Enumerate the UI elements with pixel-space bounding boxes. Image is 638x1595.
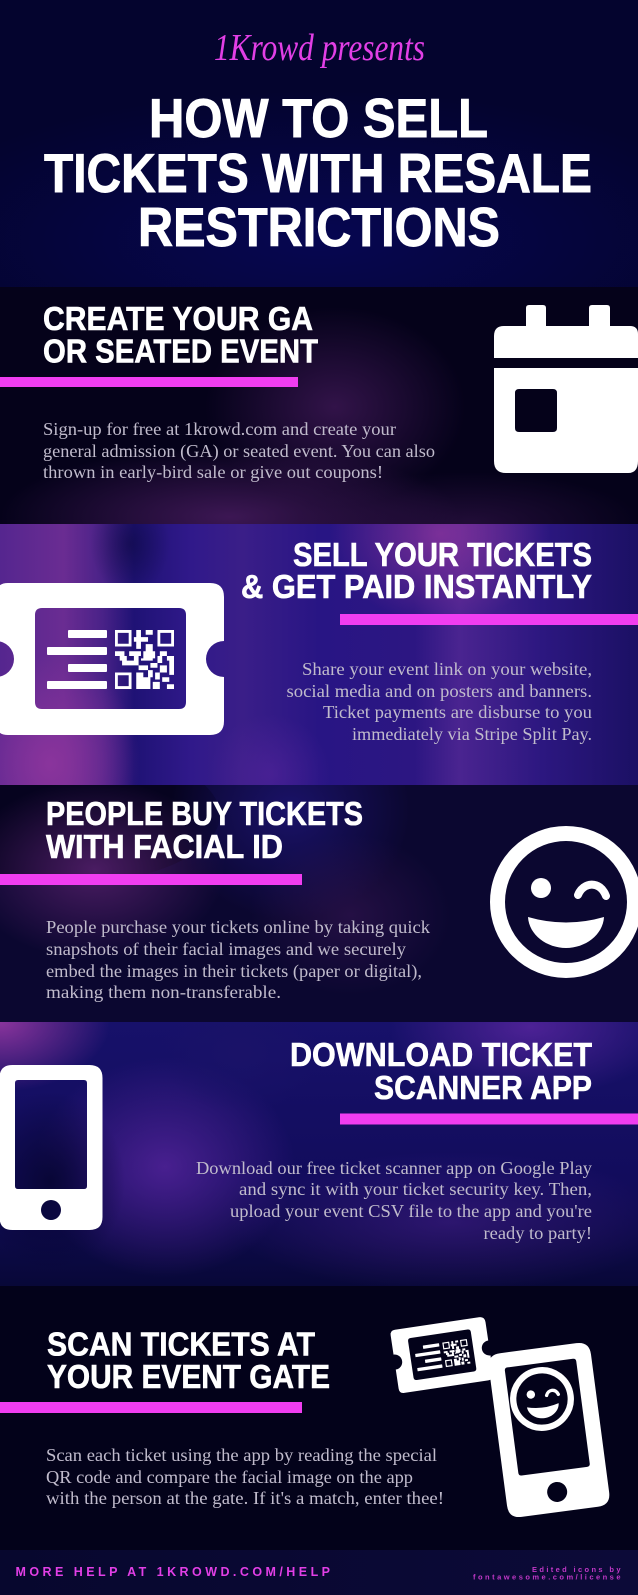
step 4 heading: SCANNER APP (374, 1069, 592, 1106)
step 2 body text: immediately via Stripe Split Pay. (352, 724, 592, 744)
step 1 body text: thrown in early-bird sale or give out coupons! (43, 462, 383, 482)
step 2 heading: & GET PAID INSTANTLY (241, 568, 592, 605)
step 5 heading: SCAN TICKETS AT (47, 1326, 315, 1362)
panel: step 1 create event (0, 287, 638, 587)
panel: step 3 facial ID (0, 700, 638, 1022)
step 3 body text: embed the images in their tickets (paper or digital), (46, 961, 422, 982)
panel: step 4 scanner app (0, 952, 638, 1292)
panel: step 2 sell tickets (0, 444, 638, 874)
step 2 body text: Ticket payments are disburse to you (323, 702, 592, 722)
step 5 heading (47, 1326, 330, 1395)
step 4 body text: Download our free ticket scanner app on Google Play (196, 1158, 592, 1178)
footer icon credit: fontawesome.com/license (473, 1572, 620, 1582)
step 4 body text: upload your event CSV file to the app and you're (230, 1201, 592, 1221)
step 1 body text: general admission (GA) or seated event. You can also (43, 441, 435, 462)
step 4 accent bar (340, 1114, 638, 1124)
step 5 body text: QR code and compare the facial image on the app (46, 1467, 413, 1487)
icon: phone (0, 1065, 102, 1230)
footer icon credit (473, 1565, 621, 1582)
step 5 accent bar (0, 1402, 302, 1413)
step 3 body text: making them non-transferable. (46, 982, 281, 1002)
title (44, 88, 592, 258)
step 3 body text (46, 917, 430, 1002)
step 1 heading (43, 300, 318, 370)
step 3 body text: People purchase your tickets online by taking quick (46, 917, 430, 937)
step 1 accent bar (0, 377, 298, 387)
step 1 heading: CREATE YOUR GA (43, 300, 313, 337)
step 2 body text: social media and on posters and banners. (286, 681, 592, 701)
step 4 heading: DOWNLOAD TICKET (290, 1036, 592, 1073)
icon: calendar (494, 305, 638, 473)
title: HOW TO SELL (149, 88, 488, 149)
step 2 heading: SELL YOUR TICKETS (293, 536, 592, 573)
step 4 heading (290, 1036, 592, 1106)
step 2 heading (241, 536, 592, 605)
step 3 body text: snapshots of their facial images and we securely (46, 939, 406, 959)
step 2 body text: Share your event link on your website, (302, 659, 592, 679)
step 5 body text: Scan each ticket using the app by reading the special (46, 1445, 437, 1465)
step 3 accent bar (0, 874, 302, 885)
step 5 body text: with the person at the gate. If it's a match, enter thee! (46, 1488, 444, 1508)
step 2 body text (286, 659, 592, 744)
step 3 heading: WITH FACIAL ID (46, 828, 283, 865)
step 5 heading: YOUR EVENT GATE (47, 1358, 330, 1395)
icon: winking face (498, 834, 634, 970)
footer help link: MORE HELP AT 1KROWD.COM/HELP (16, 1565, 330, 1579)
icon: ticket with QR code (0, 583, 224, 735)
subtitle: 1Krowd presents: 1Krowd presents (214, 27, 425, 69)
panel: footer (0, 1550, 638, 1595)
step 1 heading: OR SEATED EVENT (43, 332, 318, 370)
panel: header (0, 0, 638, 390)
step 3 heading: PEOPLE BUY TICKETS (46, 795, 363, 832)
step 5 body text (46, 1445, 444, 1508)
step 4 body text (196, 1158, 592, 1243)
footer icon credit: Edited icons by (532, 1565, 621, 1574)
step 1 body text: Sign-up for free at 1krowd.com and create your (43, 419, 396, 439)
step 4 body text: ready to party! (484, 1223, 592, 1243)
icon: ticket and phone with face (390, 1316, 611, 1519)
step 2 accent bar (340, 614, 638, 625)
step 3 heading (46, 795, 363, 865)
title: RESTRICTIONS (138, 197, 500, 258)
step 1 body text (43, 419, 435, 482)
panel: step 5 scan tickets (0, 1286, 638, 1550)
step 4 body text: and sync it with your ticket security key. Then, (239, 1179, 592, 1199)
